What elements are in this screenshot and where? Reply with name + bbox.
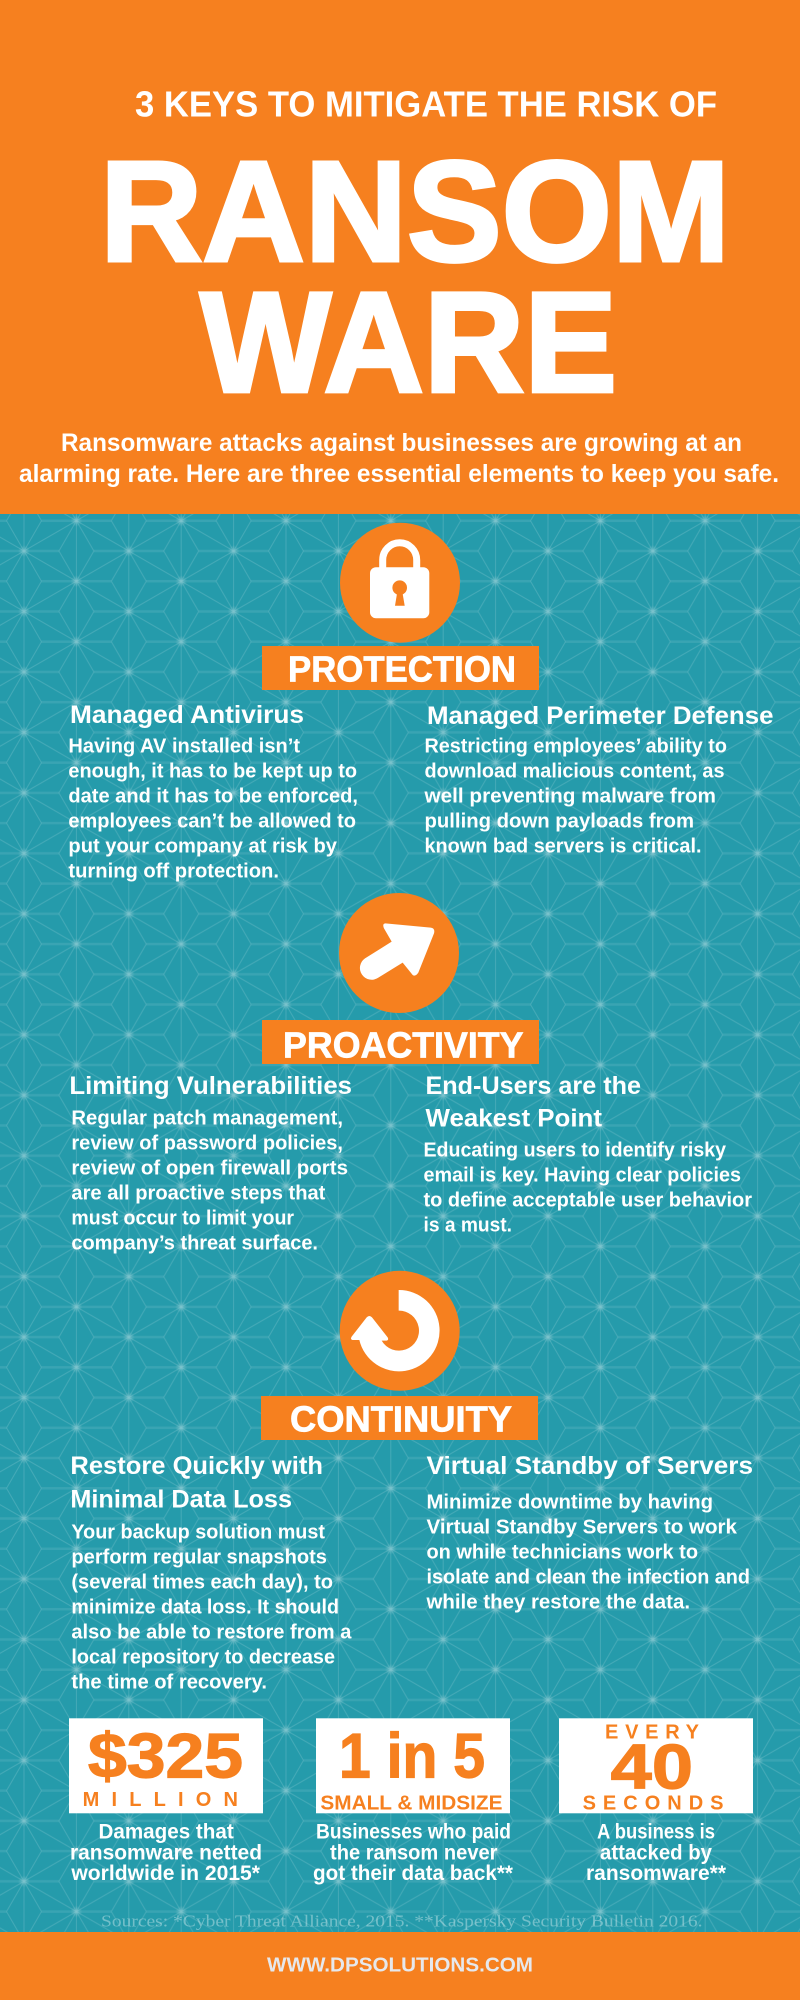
panel: footer xyxy=(0,1932,800,2000)
text block: restore quickly: (several times each day), to xyxy=(71,1571,333,1593)
caption: a business: attacked by xyxy=(600,1841,712,1864)
text block: managed perimeter defense: pulling down payloads from xyxy=(424,811,694,833)
text block: limiting vulnerabilities xyxy=(69,1072,352,1254)
text block: end-users are the weakest point: email is key. Having clear policies xyxy=(424,1165,741,1187)
caption: businesses: got their data back** xyxy=(313,1862,514,1885)
text block: virtual standby: Minimize downtime by having xyxy=(426,1491,713,1513)
text block: managed antivirus xyxy=(68,701,358,883)
text block: managed perimeter defense: Managed Perimeter Defense xyxy=(427,702,774,730)
heading banner: protection: PROTECTION xyxy=(288,649,516,690)
text block: end-users are the weakest point: is a must. xyxy=(424,1215,512,1237)
stat: $325 million: MILLION xyxy=(83,1789,238,1811)
text block: virtual standby: on while technicians work to xyxy=(426,1541,698,1563)
text block: virtual standby: isolate and clean the infection and xyxy=(426,1566,750,1588)
text block: managed perimeter defense xyxy=(423,702,774,858)
text block: virtual standby xyxy=(425,1452,753,1613)
caption: damages: worldwide in 2015* xyxy=(70,1862,261,1885)
text block: virtual standby: Virtual Standby Servers to work xyxy=(426,1516,738,1538)
text block: end-users are the weakest point: Educating users to identify risky xyxy=(424,1140,727,1162)
panel: patterned teal background xyxy=(0,514,800,1932)
stat: $325 million: $325 xyxy=(88,1721,243,1791)
heading banner: continuity: CONTINUITY xyxy=(290,1399,512,1440)
text block: limiting vulnerabilities: Regular patch management, xyxy=(71,1107,343,1129)
intro text: Ransomware attacks against businesses are growing at an xyxy=(61,429,742,457)
caption: damages: ransomware netted xyxy=(70,1841,262,1864)
stat: 1 in 5: 1 in 5 xyxy=(339,1721,485,1791)
text block: restore quickly: minimize data loss. It should xyxy=(71,1596,339,1618)
caption: a business xyxy=(586,1820,727,1885)
subtitle: 3 keys: 3 KEYS TO MITIGATE THE RISK OF xyxy=(135,83,717,124)
panel: orange header xyxy=(0,0,800,514)
text block: restore quickly: perform regular snapshots xyxy=(71,1546,327,1568)
text block: managed antivirus: Having AV installed isn’t xyxy=(68,736,300,758)
website url: WWW.DPSOLUTIONS.COM xyxy=(267,1955,533,1977)
stat: every 40 seconds xyxy=(559,1718,753,1885)
text block: restore quickly xyxy=(70,1452,352,1693)
caption: businesses: Businesses who paid xyxy=(316,1820,511,1843)
stat: every 40 seconds: 40 xyxy=(611,1733,693,1803)
text block: virtual standby: Virtual Standby of Servers xyxy=(426,1452,753,1480)
text block: limiting vulnerabilities: Limiting Vulnerabilities xyxy=(69,1072,352,1100)
caption: damages: Damages that xyxy=(98,1820,234,1843)
text block: managed perimeter defense: Restricting employees’ ability to xyxy=(424,736,727,758)
text block: managed perimeter defense: well preventing malware from xyxy=(423,786,716,808)
text block: end-users are the weakest point: End-Users are the xyxy=(426,1072,641,1100)
stat: every 40 seconds: EVERY xyxy=(605,1722,700,1744)
text block: restore quickly: also be able to restore from a xyxy=(71,1621,352,1643)
text block: managed antivirus: date and it has to be enforced, xyxy=(68,786,358,808)
text block: restore quickly: Minimal Data Loss xyxy=(70,1486,292,1514)
text block: limiting vulnerabilities: review of open firewall ports xyxy=(71,1157,348,1179)
text block: limiting vulnerabilities: must occur to limit your xyxy=(71,1207,294,1229)
text block: end-users are the weakest point: Weakest Point xyxy=(426,1105,603,1133)
text block: managed antivirus: employees can’t be allowed to xyxy=(68,811,356,833)
text block: restore quickly: Restore Quickly with xyxy=(70,1452,323,1480)
panel: protection section xyxy=(68,523,774,883)
title: ransom: RANSOM xyxy=(100,133,730,292)
text block: limiting vulnerabilities: review of password policies, xyxy=(71,1132,343,1154)
heading banner: proactivity: PROACTIVITY xyxy=(283,1024,524,1066)
icon: up-right arrow xyxy=(339,893,459,1013)
caption: damages xyxy=(70,1820,262,1885)
caption: a business: A business is xyxy=(597,1820,715,1843)
title: ware: WARE xyxy=(200,264,617,423)
text block: restore quickly: Your backup solution must xyxy=(71,1521,325,1543)
text block: limiting vulnerabilities: company’s threat surface. xyxy=(71,1232,318,1254)
stat: 1 in 5 xyxy=(313,1718,514,1885)
icon: padlock xyxy=(340,523,460,643)
stat: 1 in 5: SMALL & MIDSIZE xyxy=(320,1792,502,1814)
text block: managed antivirus: put your company at risk by xyxy=(68,836,338,858)
text block: limiting vulnerabilities: are all proactive steps that xyxy=(71,1182,326,1204)
text block: managed perimeter defense: known bad servers is critical. xyxy=(424,836,702,858)
text block: managed antivirus: turning off protection. xyxy=(68,861,279,883)
text block: restore quickly: local repository to decrease xyxy=(71,1646,335,1668)
text block: managed antivirus: Managed Antivirus xyxy=(70,701,304,729)
panel: proactivity section xyxy=(69,893,752,1254)
intro text: alarming rate. Here are three essential elements to keep you safe. xyxy=(19,460,779,488)
caption: businesses xyxy=(313,1820,514,1885)
caption: businesses: the ransom never xyxy=(330,1841,498,1864)
text block: virtual standby: while they restore the data. xyxy=(425,1591,690,1613)
icon: circular arrow xyxy=(340,1271,460,1391)
stat: every 40 seconds: SECONDS xyxy=(583,1792,724,1814)
intro text xyxy=(19,429,779,488)
text block: managed antivirus: enough, it has to be kept up to xyxy=(68,761,357,783)
sources note: Sources: *Cyber Threat Alliance, 2015. **Kaspersky Security Bulletin 2016. xyxy=(101,1912,702,1931)
panel: continuity section xyxy=(70,1271,753,1693)
text block: end-users are the weakest point: to define acceptable user behavior xyxy=(424,1190,752,1212)
stat: $325 million xyxy=(69,1718,263,1885)
text block: restore quickly: the time of recovery. xyxy=(71,1671,267,1693)
text block: end-users are the weakest point xyxy=(424,1072,752,1237)
caption: a business: ransomware** xyxy=(586,1862,727,1885)
text block: managed perimeter defense: download malicious content, as xyxy=(424,761,724,783)
